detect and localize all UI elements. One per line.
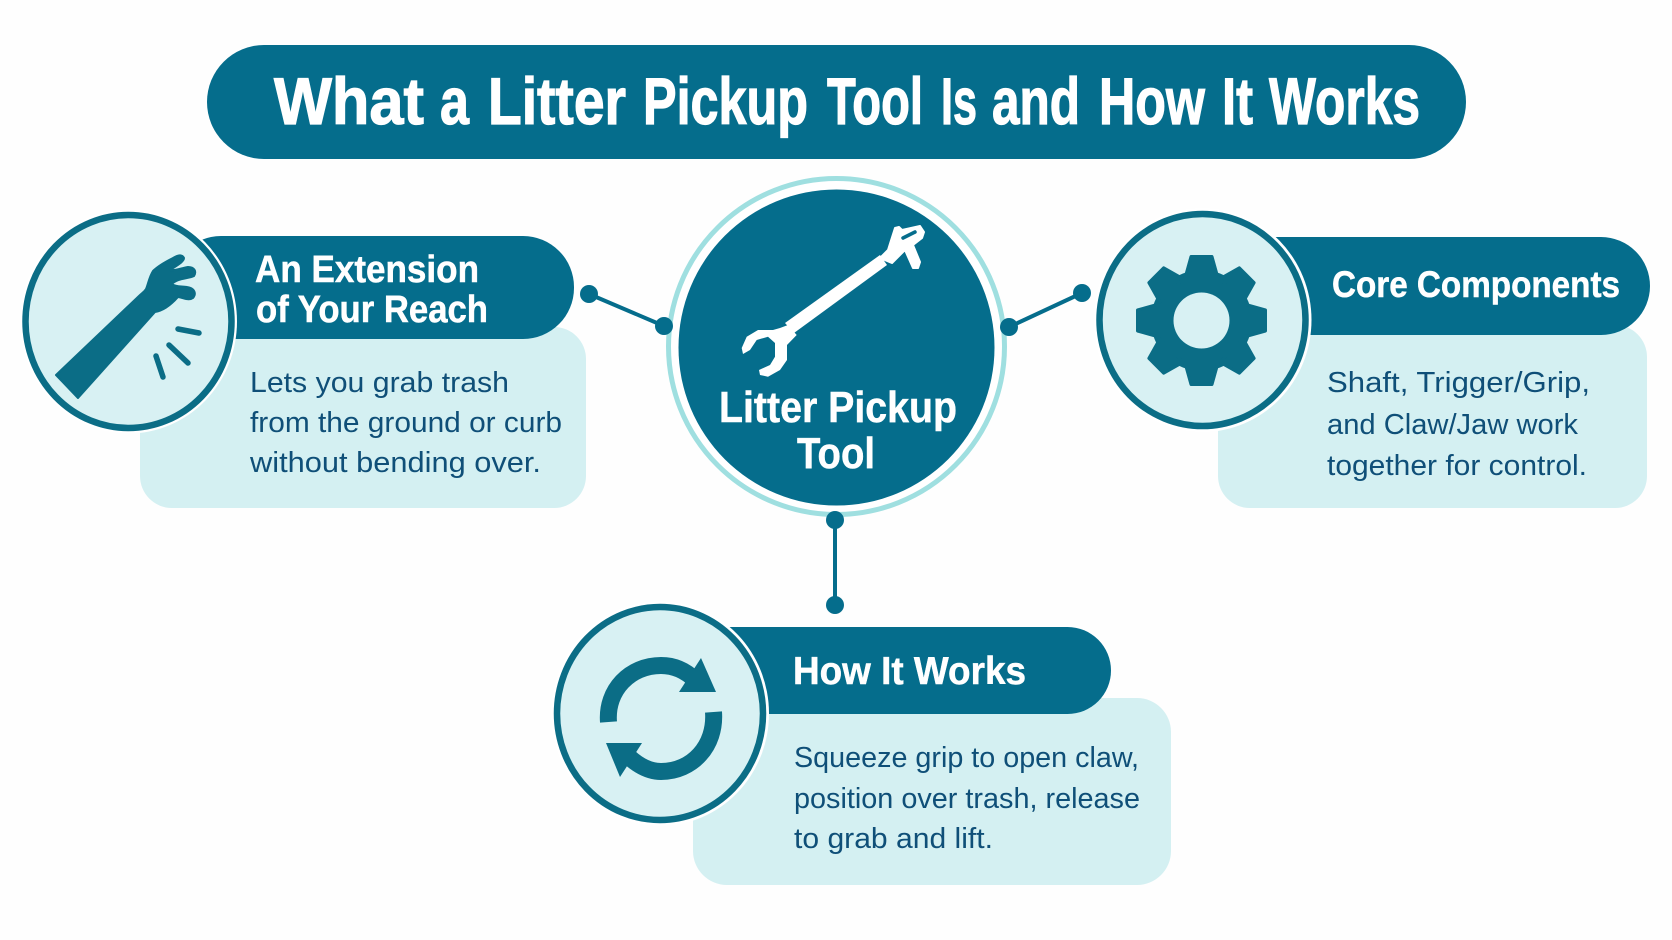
- connector: centre to bottom panel: [826, 520, 844, 614]
- heading: of Your Reach: [256, 289, 488, 331]
- body text: Lets you grab trash: [250, 367, 509, 399]
- icon: reaching arm: [20, 210, 237, 434]
- icon: cycle arrows: [551, 601, 769, 826]
- body text: without bending over.: [249, 447, 541, 479]
- title banner: Tool: [827, 64, 923, 138]
- body text: position over trash, release: [794, 783, 1140, 815]
- title banner: [207, 45, 1466, 159]
- panel: Core Components: [1094, 208, 1650, 508]
- central hub: [655, 178, 1018, 529]
- title banner: Is: [941, 64, 977, 138]
- icon: litter picker tool: [742, 226, 924, 377]
- body text: to grab and lift.: [794, 823, 993, 855]
- panel header: [1180, 237, 1650, 335]
- title banner: a: [440, 64, 470, 138]
- panel header: [170, 236, 574, 339]
- body text: from the ground or curb: [250, 407, 562, 439]
- connector: centre to left panel: [580, 285, 664, 326]
- hub label: Tool: [797, 429, 875, 478]
- title banner: How: [1099, 64, 1205, 138]
- icon: gear: [1094, 208, 1312, 432]
- title banner: and: [992, 64, 1080, 138]
- body text: Squeeze grip to open claw,: [794, 742, 1139, 774]
- heading: An Extension: [255, 249, 479, 291]
- panel header: [640, 627, 1111, 714]
- title banner: What: [274, 64, 424, 138]
- hub label: Litter Pickup: [719, 383, 957, 432]
- body text: and Claw/Jaw work: [1327, 409, 1578, 441]
- body text: [794, 742, 1140, 855]
- title banner: It: [1222, 64, 1253, 138]
- heading: How It Works: [793, 650, 1026, 693]
- connector: centre to right panel: [1009, 284, 1091, 327]
- title banner: Pickup: [643, 64, 808, 138]
- title banner: Works: [1269, 64, 1420, 138]
- hub label: [719, 383, 957, 478]
- panel: An Extension of Your Reach: [20, 210, 586, 508]
- heading: Core Components: [1332, 264, 1620, 305]
- body text: Shaft, Trigger/Grip,: [1327, 367, 1590, 399]
- heading: [255, 249, 488, 331]
- panel: How It Works: [551, 601, 1171, 885]
- body text: [249, 367, 562, 479]
- title banner: Litter: [488, 64, 626, 138]
- body text: [1327, 367, 1590, 482]
- body text: together for control.: [1327, 450, 1587, 482]
